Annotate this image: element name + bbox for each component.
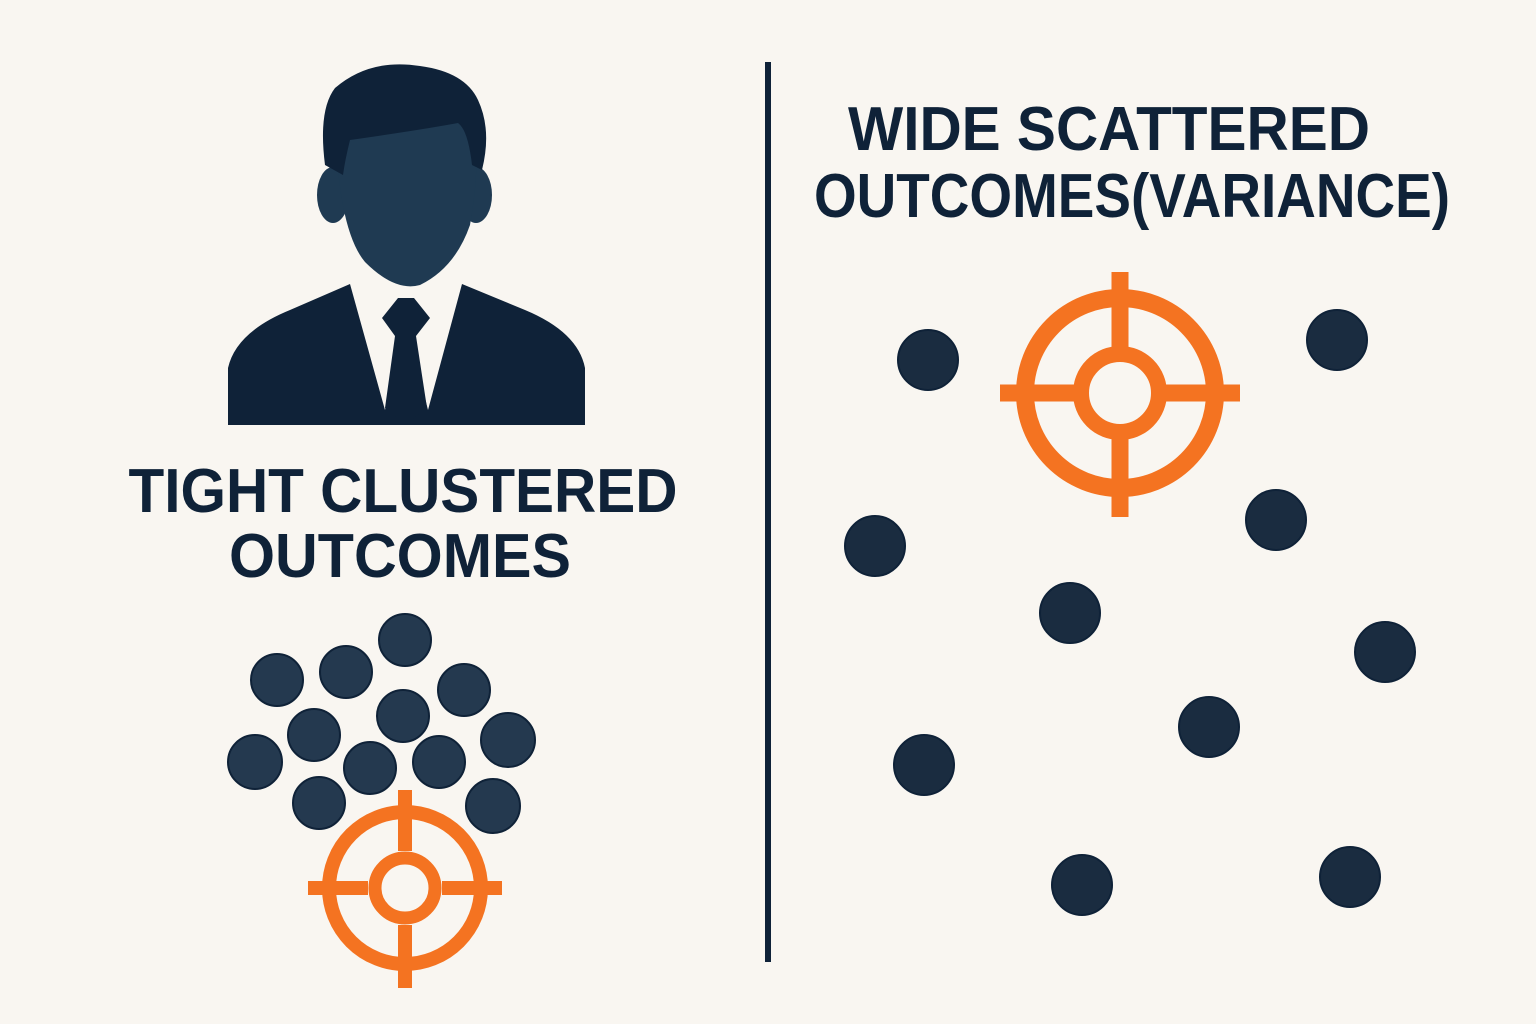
heading: wide scattered outcomes [814, 95, 1450, 231]
heading: wide scattered outcomes: WIDE SCATTERED [848, 95, 1370, 164]
heading: tight clustered outcomes: TIGHT CLUSTERED [128, 457, 678, 526]
heading: tight clustered outcomes [128, 457, 678, 591]
clustered dots [228, 614, 535, 833]
heading: tight clustered outcomes: OUTCOMES [229, 522, 571, 591]
icon: right target [1000, 272, 1240, 517]
heading: wide scattered outcomes: OUTCOMES(VARIANCE) [814, 162, 1450, 231]
icon: left target [308, 790, 502, 988]
scattered dots [845, 310, 1415, 915]
icon: businessman [228, 64, 585, 425]
divider line [765, 62, 771, 962]
